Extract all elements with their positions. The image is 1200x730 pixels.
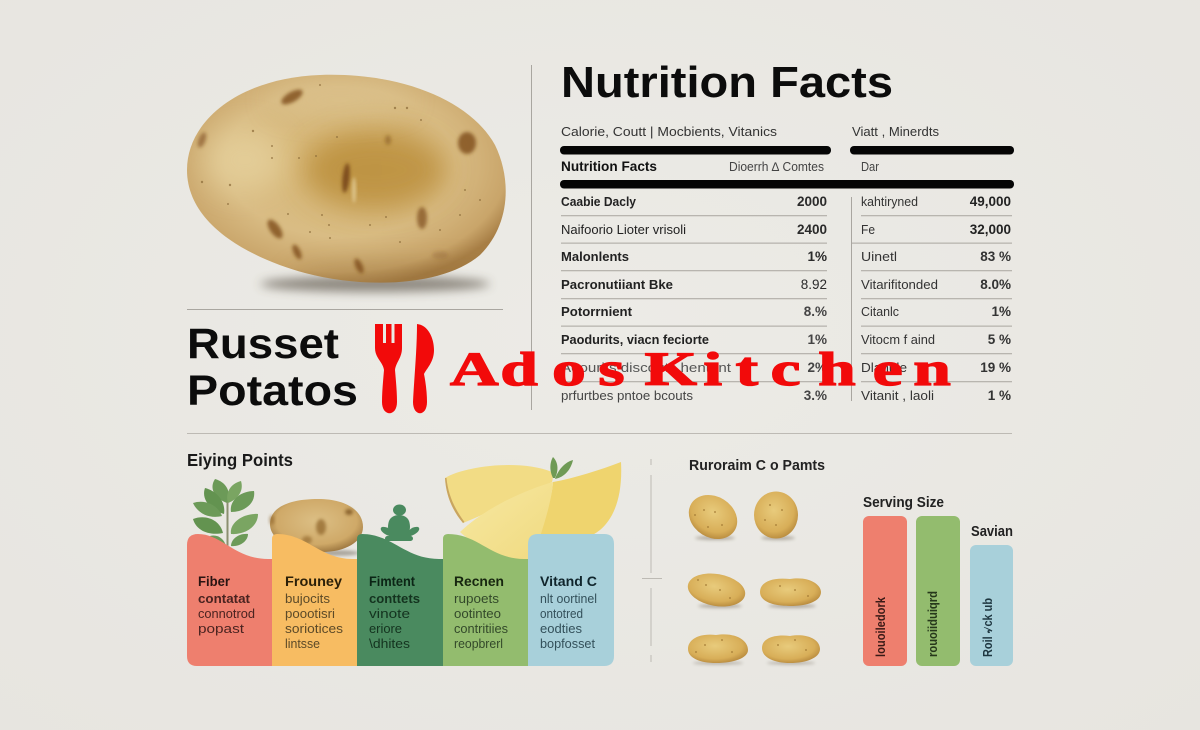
table left values [797,194,827,403]
table header labels: Nutrition Facts [561,159,657,174]
table right labels: Fe [861,222,875,237]
panel: Fimtent: Fimtent [369,573,415,589]
heading: Rurorairn C o Pamts: Ruroraim C o Pamts [689,458,825,474]
divider vertical [531,65,532,410]
icon: small whole potato [270,499,363,556]
table header labels: Dar [861,160,879,174]
table left values: 3.% [804,388,827,403]
table right labels: Vitarifitonded [861,277,938,292]
table left values: 2% [807,360,827,375]
panel: Vitand C: bopfosset [540,636,595,651]
table header labels [561,125,939,174]
icon: leafy herb [193,479,258,549]
table right labels: kahtiryned [861,194,918,209]
table left labels: Potorrnient [561,304,633,319]
table left labels: Malonlents [561,249,629,264]
panel: Fimtent [357,534,443,666]
table left labels [561,194,731,403]
icon: potato grid [681,486,821,664]
panel: Frouney [272,534,357,666]
table right labels [861,194,938,403]
bar: green serving [916,516,960,666]
table right values: 19 % [980,360,1011,375]
table thick rules [560,146,1014,188]
table header labels: Viatt , Minerdts [852,125,939,139]
table right values: 5 % [988,332,1011,347]
table right labels: Dlanule [861,360,907,375]
table left values: 1% [807,249,827,264]
table left values: 2400 [797,222,827,237]
table left labels: Caabie Dacly [561,194,637,209]
divider: dotted vertical [642,459,662,662]
bar: red serving: louoiledork [874,597,888,657]
bar: green serving: rouoiiduiqrd [926,591,940,657]
panel: Vitand C: ontotred [540,606,583,621]
table header labels: Dioerrh ∆ Comtes [729,160,824,174]
table right labels: Uinetl [861,249,897,264]
panel: Fimtent: eriore [369,621,402,636]
panel: Fiber [187,534,272,666]
title: Russet Potatos: Potatos [187,367,358,415]
table right labels: Citanlc [861,304,899,319]
heading: Savian: Savian [971,524,1013,540]
bar: red serving [863,516,907,666]
icon: red fork and knife logo [375,324,434,413]
panel: Fimtent: conttets [369,591,420,606]
table left values: 8.% [804,304,827,319]
table left values: 1% [807,332,827,347]
panel: Recnen: reopbrerl [454,636,503,651]
panel: Fiber: Fiber [198,573,231,589]
table right values: 49,000 [970,194,1011,209]
heading: Nutrition Facts: Nutrition Facts [561,58,893,107]
title: Russet Potatos [187,320,358,415]
panel: Vitand C [528,534,614,666]
panel: Recnen: contritiies [454,621,508,636]
table right labels: Vitocm f aind [861,332,935,347]
table right values: 83 % [980,249,1011,264]
table left labels: Paodurits, viacn feciorte [561,332,709,347]
panel: Fiber: popast [198,621,244,636]
panel: Recnen: ootinteo [454,606,501,621]
table row rules [561,197,1012,401]
table right values: 32,000 [970,222,1011,237]
heading: Serving Size: Serving Size [863,495,944,511]
watermark: AdosKitchen: AdosKitchen [450,342,951,396]
table right values: 1 % [988,388,1011,403]
table left labels: Naifoorio Lioter vrisoli [561,222,686,237]
icon: green sprout [381,504,419,541]
panel: Recnen: Recnen [454,573,504,589]
panel: Recnen [443,534,528,666]
table left values: 2000 [797,194,827,209]
panel: Fimtent: \dhites [369,636,411,651]
panel: Fiber: connotrod [198,606,255,621]
table left labels: Pacronutiiant Bke [561,277,673,292]
panel: Fimtent: vinote [369,606,410,621]
icon: potato wedges [445,457,621,559]
table header labels: Calorie, Coutt | Mocbients, Vitanics [561,125,777,139]
table left labels: Aeourits discouts hentent [561,360,731,375]
bar: blue serving [970,545,1013,666]
panel: Frouney: soriotices [285,621,344,636]
divider horizontal [187,433,1012,434]
panel: Frouney: poootisri [285,606,335,621]
panel: Frouney: lintsse [285,636,320,651]
heading: Eiying Points: Eiying Points [187,450,293,470]
panel: Recnen: rupoets [454,591,500,606]
table right values: 1% [991,304,1011,319]
nutrition table [560,125,1014,403]
table right labels: Vitanit , laoli [861,388,934,403]
panel: Frouney: bujocits [285,591,331,606]
title: Russet Potatos: Russet [187,320,339,368]
panel: Vitand C: nlt oortinel [540,591,597,606]
table right values: 8.0% [980,277,1011,292]
bar: blue serving: Roil ৵ck ub [981,598,995,657]
divider under potato [187,309,503,310]
table left labels: prfurtbes pntoe bcouts [561,388,694,403]
panel: Vitand C: eodties [540,621,582,636]
panel: Frouney: Frouney [285,573,342,589]
panel: Fiber: contatat [198,591,251,606]
table right values [970,194,1011,403]
icon: large russet potato [187,75,510,292]
table left values: 8.92 [801,277,827,292]
panel: Vitand C: Vitand C [540,573,597,589]
